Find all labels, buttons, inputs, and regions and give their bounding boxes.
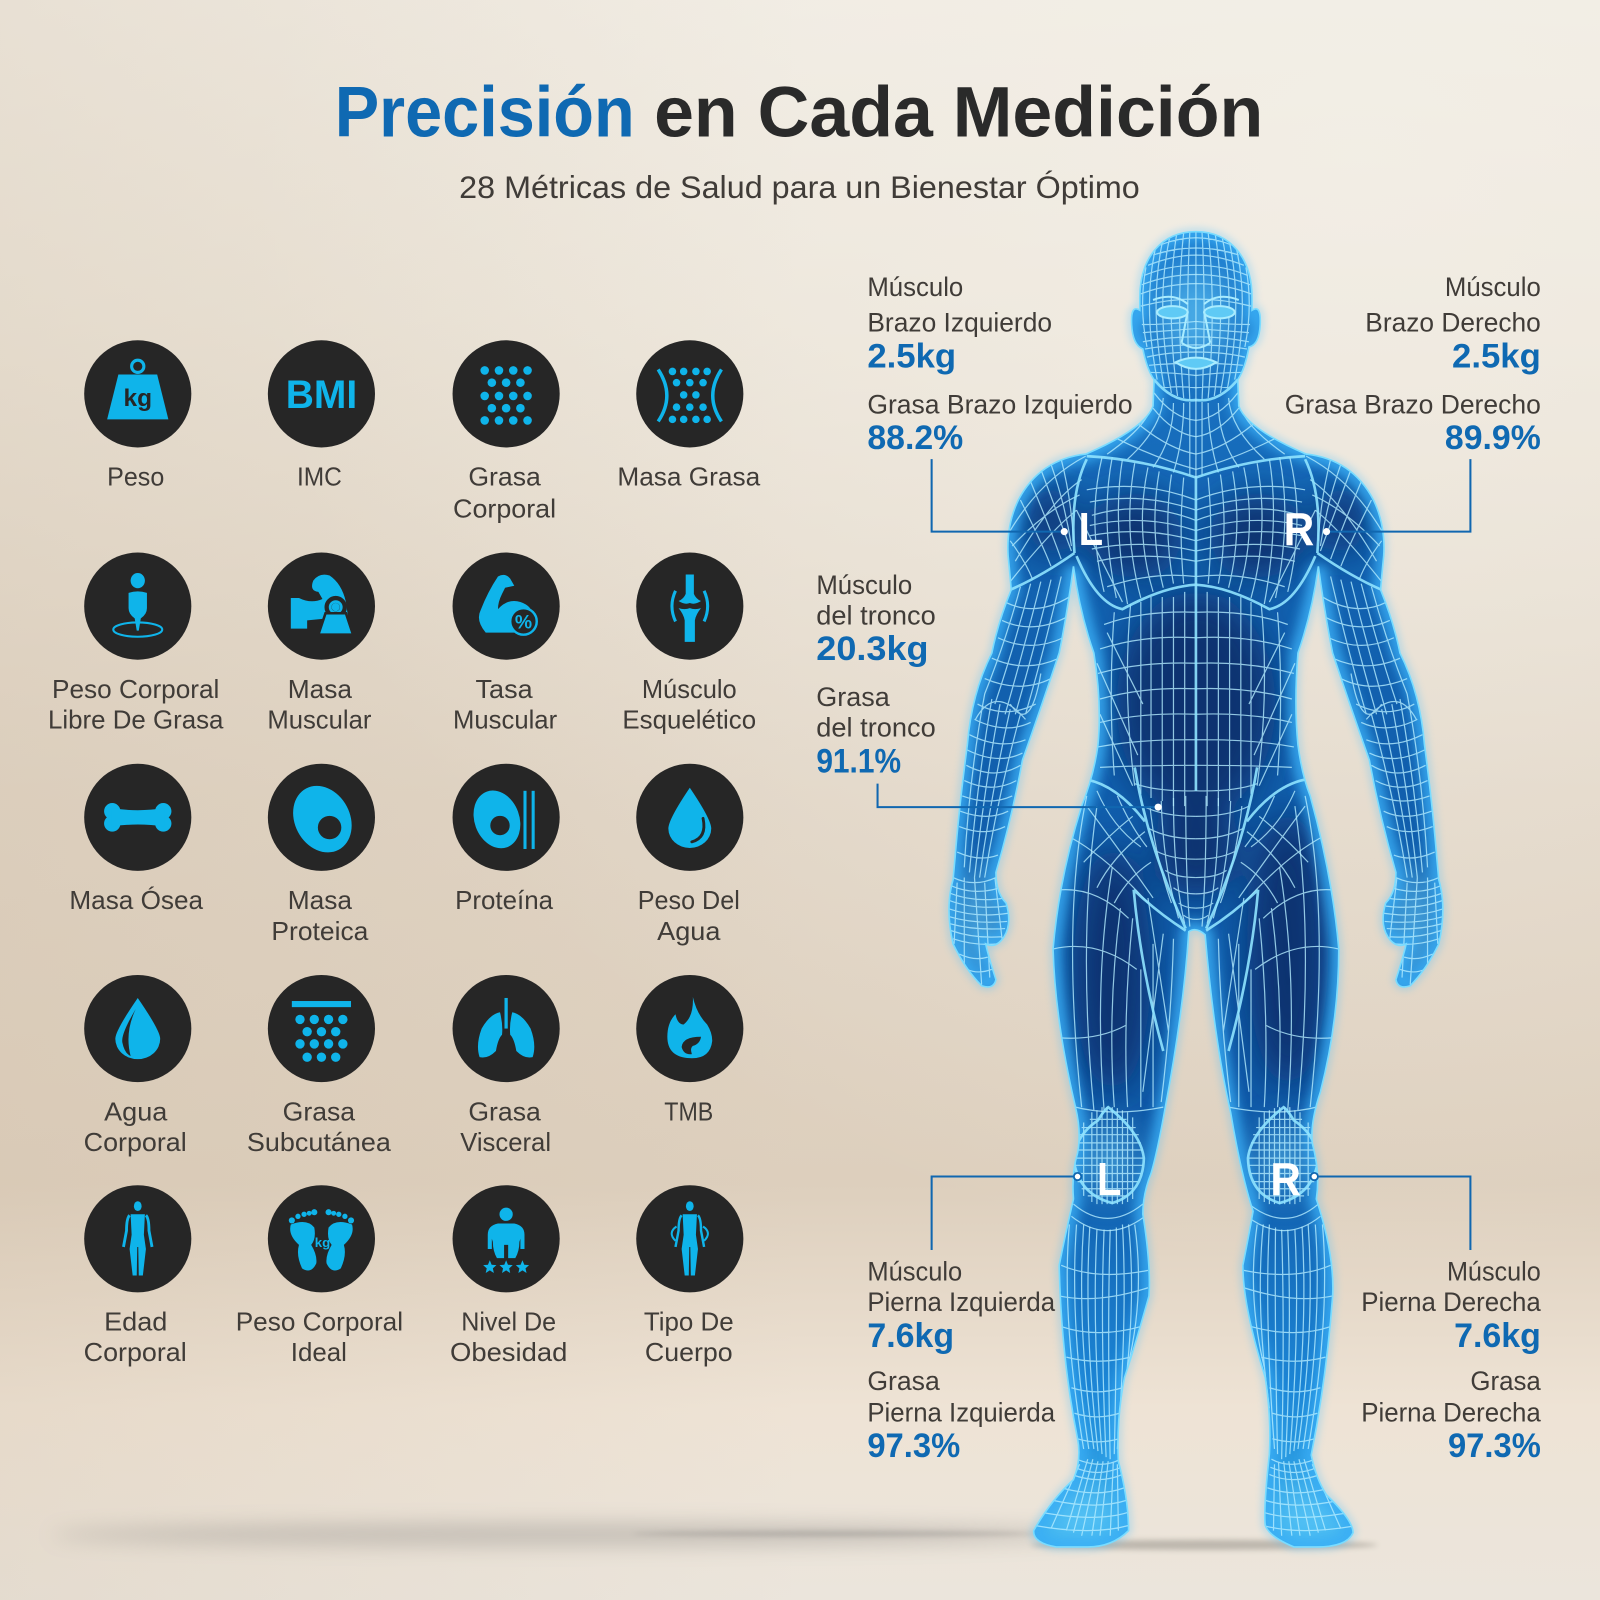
icon: fat mass: [636, 340, 743, 447]
human body wireframe figure: [947, 232, 1445, 1547]
metric: Grasa Visceral: [453, 975, 560, 1157]
callout: left arm stats: 2.5kg: [867, 337, 956, 375]
metric: Masa Muscular: [267, 553, 375, 735]
label: Muscular: [267, 707, 372, 735]
metric: Músculo Esquelético: [622, 553, 756, 735]
callout: left leg stats: 7.6kg: [867, 1317, 954, 1355]
icon: obese figure with stars: [453, 1185, 560, 1292]
label: [271, 887, 369, 946]
label: Peso Corporal: [236, 1309, 403, 1337]
connector: left leg: [932, 1173, 1081, 1250]
metric: IMC: [268, 340, 375, 492]
metric: Tipo De Cuerpo: [636, 1185, 743, 1367]
icon: weight: [84, 340, 191, 447]
label: [236, 1309, 403, 1367]
marker: L leg: L: [1097, 1153, 1121, 1205]
callout: right arm stats: 2.5kg: [1452, 337, 1541, 375]
callout: right leg stats: Pierna Derecha: [1361, 1287, 1541, 1317]
metric: Peso Del Agua: [636, 764, 743, 946]
icon: BMI: [268, 340, 375, 447]
callout: right arm stats: [1285, 272, 1541, 457]
label: Muscular: [453, 707, 558, 735]
icon: drop: [84, 975, 191, 1082]
icon: arm with percent: %: [515, 612, 532, 634]
label: [453, 676, 558, 735]
label: Libre De Grasa: [48, 707, 224, 735]
label: [638, 887, 740, 946]
label: Masa: [288, 676, 353, 704]
label: TMB: [664, 1098, 713, 1126]
callout: left arm stats: Músculo: [867, 272, 963, 302]
callout: trunk stats: Músculo: [816, 570, 912, 600]
label: [84, 1098, 187, 1157]
icon: knee joint: [636, 553, 743, 660]
callout: right arm stats: Músculo: [1445, 272, 1541, 302]
metric: Masa Ósea: [69, 764, 204, 915]
callout: trunk stats: 91.1%: [816, 742, 901, 780]
label: Corporal: [453, 495, 556, 523]
connector: left arm: [932, 459, 1068, 535]
metric: Peso Corporal Ideal: [236, 1185, 403, 1367]
label: Subcutánea: [247, 1129, 392, 1157]
label: Grasa: [283, 1098, 356, 1126]
connector: trunk: [878, 784, 1162, 811]
callout: trunk stats: del tronco: [816, 600, 936, 630]
label: Grasa: [468, 1098, 542, 1126]
label: Ideal: [291, 1339, 347, 1367]
callout: right leg stats: 97.3%: [1448, 1427, 1541, 1465]
icon: drop: [636, 764, 743, 871]
metric: Masa Grasa: [617, 340, 761, 492]
callout: trunk stats: 20.3kg: [816, 630, 929, 668]
label: Agua: [104, 1098, 168, 1126]
icon: bone: [84, 764, 191, 871]
label: Masa: [288, 887, 353, 915]
marker: R arm: R: [1284, 503, 1314, 555]
icon: feet: kg: [315, 1235, 330, 1250]
icon: egg: [268, 764, 375, 871]
callout: left leg stats: [867, 1257, 1055, 1465]
label: Corporal: [84, 1339, 187, 1367]
label: Grasa: [468, 464, 542, 492]
label: Masa Grasa: [617, 464, 761, 492]
label: [267, 676, 372, 735]
callout: left arm stats: 88.2%: [867, 419, 963, 457]
face features: [1153, 297, 1239, 369]
marker: R leg: R: [1270, 1153, 1301, 1205]
title: dark part: en Cada Medición: [654, 73, 1263, 153]
icon: arm with kettlebell: [268, 553, 375, 660]
callout: left leg stats: Grasa: [867, 1366, 940, 1396]
metric: Peso: [84, 340, 191, 492]
callout: left arm stats: Brazo Izquierdo: [867, 308, 1052, 338]
metric: Nivel De Obesidad: [450, 1185, 567, 1367]
label: Peso Del: [638, 887, 740, 915]
icon: arm with percent: [453, 553, 560, 660]
label: Proteica: [271, 918, 369, 946]
connector: right leg: [1311, 1173, 1470, 1250]
label: Músculo: [642, 676, 737, 704]
callout: trunk stats: [816, 570, 936, 780]
icon: egg with lines: [453, 764, 560, 871]
metric: Proteína: [453, 764, 560, 915]
callout: right leg stats: Pierna Derecha: [1361, 1397, 1541, 1427]
label: Esquelético: [622, 707, 756, 735]
label: Masa Ósea: [69, 886, 204, 915]
icon: person with rotation arrows: [636, 1185, 743, 1292]
marker: L arm: L: [1079, 503, 1103, 555]
icon: person: [84, 1185, 191, 1292]
callout: right leg stats: 7.6kg: [1454, 1317, 1541, 1355]
icon: fat dots: [453, 340, 560, 447]
label: [460, 1098, 551, 1157]
icon: lungs: [453, 975, 560, 1082]
label: IMC: [297, 464, 342, 492]
callout: trunk stats: del tronco: [816, 713, 936, 743]
label: [453, 464, 556, 523]
metric: Agua Corporal: [84, 975, 191, 1157]
label: Visceral: [460, 1129, 551, 1157]
callout: left arm stats: [867, 272, 1133, 457]
callout: left leg stats: Pierna Izquierda: [867, 1397, 1055, 1427]
callout: right leg stats: Músculo: [1447, 1257, 1541, 1287]
label: Tipo De: [644, 1309, 734, 1337]
icon: weight: kg: [123, 385, 152, 412]
callout: right arm stats: Brazo Derecho: [1365, 308, 1541, 338]
label: [48, 676, 224, 735]
title: blue part: Precisión: [335, 73, 635, 153]
callout: right leg stats: [1361, 1257, 1541, 1465]
icon: subcutaneous fat: [268, 975, 375, 1082]
metric: Grasa Subcutánea: [247, 975, 392, 1157]
label: Obesidad: [450, 1339, 567, 1367]
label: Corporal: [84, 1129, 187, 1157]
label: Proteína: [455, 887, 554, 915]
callout: left leg stats: 97.3%: [867, 1427, 960, 1465]
label: [450, 1309, 567, 1367]
callout: trunk stats: Grasa: [816, 682, 890, 712]
label: [84, 1309, 187, 1367]
label: Nivel De: [461, 1309, 556, 1337]
callout: right arm stats: 89.9%: [1445, 419, 1541, 457]
label: Edad: [104, 1309, 167, 1337]
icon: lean body: [84, 553, 191, 660]
callout: left leg stats: Músculo: [867, 1257, 962, 1287]
label: Agua: [657, 918, 721, 946]
panel: metric icon grid: [48, 340, 761, 1367]
label: Cuerpo: [645, 1339, 733, 1367]
icon: flame: [636, 975, 743, 1082]
icon: feet: [268, 1185, 375, 1292]
label: Peso Corporal: [52, 676, 219, 704]
metric: Masa Proteica: [268, 764, 375, 946]
metric: Grasa Corporal: [453, 340, 560, 523]
label: Tasa: [476, 676, 534, 704]
label: [622, 676, 756, 735]
metric: TMB: [636, 975, 743, 1126]
subtitle: 28 Métricas de Salud para un Bienestar Óptimo: [459, 169, 1140, 205]
metric: Peso Corporal Libre De Grasa: [48, 553, 224, 735]
label: [247, 1098, 392, 1157]
connector: right arm: [1323, 459, 1470, 535]
label: Peso: [107, 464, 164, 492]
callout: right arm stats: Grasa Brazo Derecho: [1285, 389, 1541, 419]
callout: right leg stats: Grasa: [1470, 1366, 1541, 1396]
callout: left arm stats: Grasa Brazo Izquierdo: [867, 389, 1133, 419]
metric: Edad Corporal: [84, 1185, 191, 1367]
label: [644, 1309, 734, 1367]
callout: left leg stats: Pierna Izquierda: [867, 1287, 1055, 1317]
metric: Tasa Muscular: [453, 553, 560, 735]
icon: BMI: BMI: [286, 373, 357, 417]
